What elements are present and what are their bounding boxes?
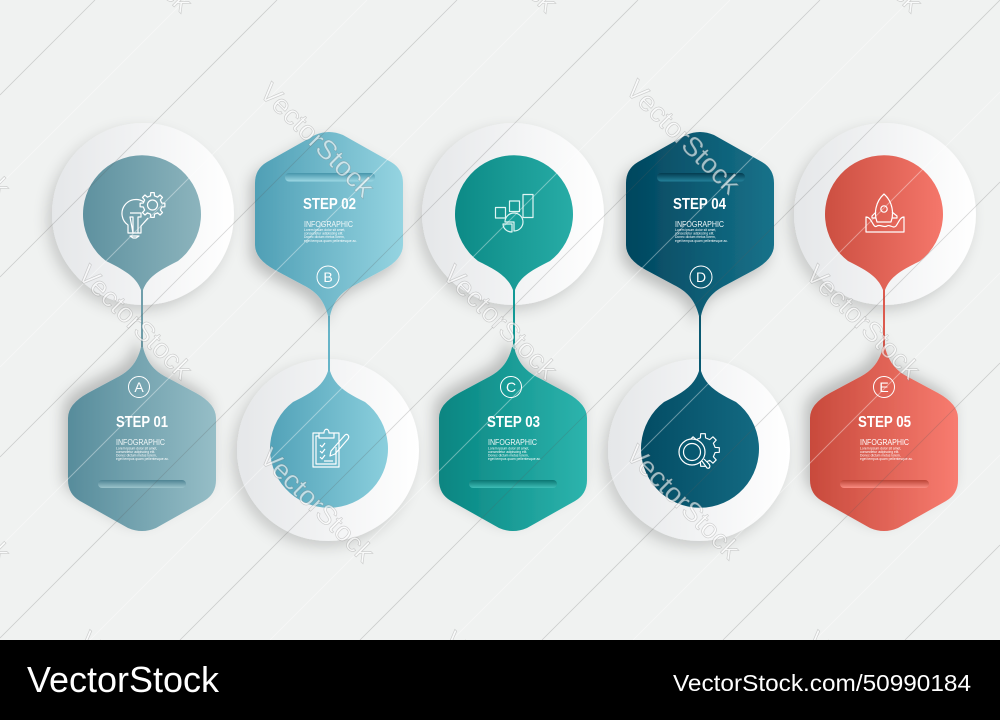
connector: column 3 [513, 280, 515, 352]
letter badge E [874, 376, 894, 398]
connector: column 5 [883, 280, 885, 352]
letter badge E: E [879, 379, 889, 395]
watermark text: VectorStock [254, 442, 380, 568]
icon: rocket launch [866, 194, 904, 232]
body text: Donec dictum metus lorem, [488, 454, 529, 458]
panel: step 02 [255, 132, 403, 316]
heading: STEP 04 [673, 196, 726, 213]
watermark text: V [437, 625, 471, 659]
disc: column 1 [52, 123, 234, 305]
panel: step 05 [810, 347, 958, 531]
slot bar [285, 173, 375, 182]
body text: consectetur adipiscing elit. [304, 232, 343, 236]
letter badge B [317, 266, 339, 288]
body text: Donec dictum metus lorem, [860, 454, 901, 458]
body text [488, 446, 541, 461]
subheading: INFOGRAPHIC [304, 219, 353, 229]
body text: Lorem ipsum dolor sit amet, [488, 446, 529, 450]
teardrop: column 5 [825, 155, 943, 290]
heading: STEP 02 [303, 196, 356, 213]
slot bar [469, 480, 557, 488]
body text [304, 228, 357, 243]
body text: Lorem ipsum dolor sit amet, [304, 228, 345, 232]
teardrop: column 2 [270, 371, 388, 508]
letter badge C: C [506, 379, 516, 395]
body text: Donec dictum metus lorem, [304, 235, 345, 239]
footer image id: VectorStock.com/50990184 [673, 670, 971, 696]
body text: Lorem ipsum dolor sit amet, [860, 446, 901, 450]
body text: eget tempus quam pellentesque ac. [860, 457, 913, 461]
icon: gear and magnifier [679, 434, 719, 468]
watermark text: VectorStock [437, 259, 563, 385]
footer bar [0, 640, 1000, 720]
icon: clipboard and pen [313, 429, 349, 467]
body text [860, 446, 913, 461]
letter badge D [690, 266, 712, 288]
disc: column 3 [422, 123, 604, 305]
subheading: INFOGRAPHIC [675, 219, 724, 229]
letter badge B: B [323, 269, 333, 285]
connector: column 2 [328, 308, 330, 378]
disc: column 2 [237, 359, 419, 541]
watermark text: V [72, 625, 106, 659]
letter badge C [500, 376, 522, 398]
panel: step 04 [626, 132, 774, 316]
letter badge D: D [696, 269, 706, 285]
heading: STEP 01 [116, 414, 168, 431]
body text: consectetur adipiscing elit. [675, 232, 714, 236]
footer logo: VectorStock [27, 659, 220, 700]
icon: light bulb and gear [122, 193, 165, 238]
watermark text: VectorStock [254, 77, 380, 203]
body text: consectetur adipiscing elit. [860, 450, 899, 454]
heading: STEP 03 [487, 414, 540, 431]
panel: step 03 [439, 347, 587, 531]
body text: Lorem ipsum dolor sit amet, [116, 446, 157, 450]
subheading: INFOGRAPHIC [116, 437, 165, 447]
watermark text: VectorStock [620, 439, 746, 565]
body text: Lorem ipsum dolor sit amet, [675, 228, 716, 232]
disc: column 5 [794, 123, 976, 305]
teardrop: column 4 [641, 371, 759, 508]
watermark text: V [800, 625, 834, 659]
letter badge A [128, 376, 150, 398]
body text: eget tempus quam pellentesque ac. [116, 457, 169, 461]
slot bar [840, 480, 929, 488]
body text: eget tempus quam pellentesque ac. [304, 239, 357, 243]
subheading: INFOGRAPHIC [488, 437, 537, 447]
teardrop: column 3 [455, 155, 573, 290]
body text: consectetur adipiscing elit. [116, 450, 155, 454]
heading: STEP 05 [858, 414, 911, 431]
watermark text: VectorStock [72, 259, 198, 385]
slot bar [657, 173, 745, 182]
watermark text: VectorStock [800, 259, 926, 385]
watermark text: VectorStock [620, 74, 746, 200]
body text: Donec dictum metus lorem, [116, 454, 157, 458]
letter badge A: A [134, 379, 144, 395]
body text: eget tempus quam pellentesque ac. [675, 239, 728, 243]
slot bar [98, 480, 186, 488]
body text: Donec dictum metus lorem, [675, 235, 716, 239]
icon: charts [496, 194, 533, 232]
body text: eget tempus quam pellentesque ac. [488, 457, 541, 461]
panel: step 01 [68, 347, 216, 531]
teardrop: column 1 [83, 155, 201, 290]
disc: column 4 [608, 359, 790, 541]
connector: column 4 [699, 308, 701, 378]
connector: column 1 [141, 280, 143, 352]
body text [116, 446, 169, 461]
body text [675, 228, 728, 243]
subheading: INFOGRAPHIC [860, 437, 909, 447]
body text: consectetur adipiscing elit. [488, 450, 527, 454]
